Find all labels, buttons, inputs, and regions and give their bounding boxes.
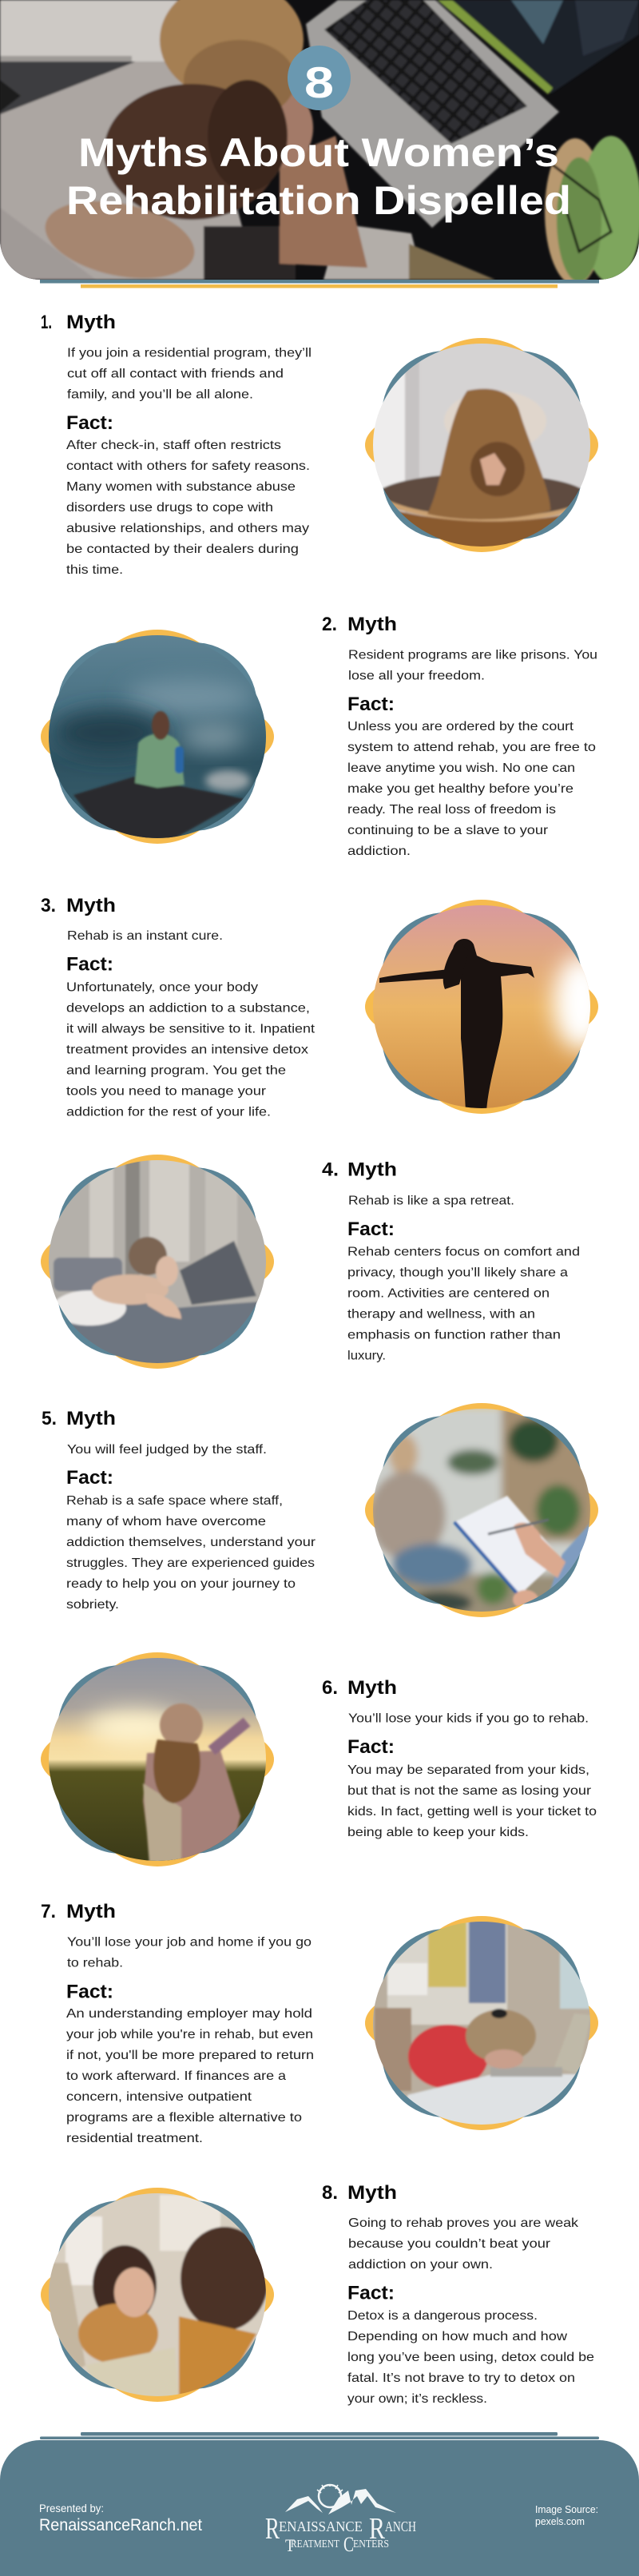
logo: Renaissance Ranch Treatment Centers: C bbox=[343, 2533, 354, 2556]
title: Rehabilitation Dispelled bbox=[66, 178, 571, 223]
footer divider bars bbox=[40, 2432, 599, 2439]
header photo banner bbox=[0, 0, 639, 291]
myth 3 heading bbox=[41, 895, 116, 916]
myth 8 heading: 8. bbox=[322, 2182, 338, 2204]
number badge bbox=[288, 46, 351, 110]
fact 6 text: You may be separated from your kids, bbox=[347, 1763, 589, 1777]
fact 3 text: it will always be sensitive to it. Inpatient bbox=[66, 1023, 316, 1036]
fact 1 text: this time. bbox=[66, 563, 123, 577]
fact 7 text: An understanding employer may hold bbox=[66, 2007, 312, 2021]
image source: Image Source: bbox=[535, 2503, 598, 2515]
myth 3 heading: Myth bbox=[66, 895, 116, 916]
myth 7 heading: Myth bbox=[66, 1901, 116, 1922]
presented by: RenaissanceRanch.net bbox=[39, 2516, 202, 2534]
myth 6 statement: You’ll lose your kids if you go to rehab. bbox=[348, 1711, 589, 1726]
fact 8 text: fatal. It’s not brave to try to detox on bbox=[347, 2371, 575, 2385]
fact 7 heading: Fact: bbox=[66, 1982, 113, 2002]
image source: pexels.com bbox=[535, 2515, 585, 2527]
photo: mother and child in field at sunset bbox=[41, 1652, 274, 1866]
myth 2 heading bbox=[322, 614, 397, 635]
fact 4 text bbox=[347, 1245, 580, 1363]
fact 8 text: your own; it’s reckless. bbox=[347, 2392, 487, 2406]
fact 2 text bbox=[347, 720, 596, 858]
fact 4 text: Rehab centers focus on comfort and bbox=[347, 1245, 580, 1259]
fact 7 text: if not, you'll be more prepared to return bbox=[66, 2049, 314, 2062]
myth 7 statement: You’ll lose your job and home if you go bbox=[67, 1935, 312, 1950]
logo: Renaissance Ranch Treatment Centers: ANCH bbox=[385, 2518, 416, 2534]
fact 1 text: disorders use drugs to cope with bbox=[66, 501, 273, 515]
fact 4 text: emphasis on function rather than bbox=[347, 1328, 561, 1342]
myth 4 heading bbox=[322, 1159, 397, 1181]
fact 2 text: system to attend rehab, you are free to bbox=[347, 741, 596, 754]
photo: woman with head on table bbox=[365, 338, 598, 552]
logo: Renaissance Ranch Treatment Centers: R bbox=[265, 2512, 280, 2546]
fact 4 text: privacy, though you’ll likely share a bbox=[347, 1266, 568, 1280]
fact 2 text: ready. The real loss of freedom is bbox=[347, 803, 556, 817]
fact 6 text: but that is not the same as losing your bbox=[347, 1784, 592, 1798]
fact 7 text bbox=[66, 2007, 314, 2145]
fact 5 text: Rehab is a safe space where staff, bbox=[66, 1494, 283, 1508]
title bbox=[66, 130, 571, 223]
myth 7 heading bbox=[41, 1901, 116, 1922]
panel: myth 5 bbox=[42, 1403, 598, 1622]
fact 3 text: develops an addiction to a substance, bbox=[66, 1002, 310, 1015]
fact 1 text: be contacted by their dealers during bbox=[66, 543, 299, 556]
fact 8 text: long you’ve been using, detox could be bbox=[347, 2351, 594, 2364]
myth 4 heading: 4. bbox=[322, 1159, 339, 1181]
fact 5 text bbox=[66, 1494, 316, 1612]
fact 1 text bbox=[66, 439, 310, 577]
myth 5 heading: 5. bbox=[42, 1408, 57, 1429]
fact 7 text: programs are a flexible alternative to bbox=[66, 2111, 302, 2125]
icon: sun and mountains bbox=[285, 2484, 396, 2514]
fact 2 text: continuing to be a slave to your bbox=[347, 824, 549, 837]
panel: myth 3 bbox=[41, 895, 609, 1119]
panel: myth 7 bbox=[41, 1901, 598, 2145]
fact 1 text: Many women with substance abuse bbox=[66, 480, 296, 494]
myth 8 heading: Myth bbox=[347, 2182, 397, 2204]
fact 4 text: therapy and wellness, with an bbox=[347, 1307, 535, 1322]
myth 4 statement: Rehab is like a spa retreat. bbox=[348, 1194, 514, 1208]
myth 2 statement bbox=[348, 649, 597, 682]
myth 1 heading: Myth bbox=[66, 312, 116, 333]
fact 8 heading: Fact: bbox=[347, 2282, 395, 2304]
logo: Renaissance Ranch Treatment Centers: R bbox=[369, 2512, 386, 2546]
myth 6 heading: Myth bbox=[347, 1677, 397, 1699]
myth 2 statement: lose all your freedom. bbox=[348, 670, 485, 682]
myth 2 heading: 2. bbox=[322, 614, 337, 635]
panel: myth 6 bbox=[41, 1652, 597, 1866]
myth 8 heading bbox=[322, 2182, 397, 2204]
fact 5 text: struggles. They are experienced guides bbox=[66, 1556, 315, 1570]
myth 7 statement bbox=[67, 1935, 312, 1970]
footer panel bbox=[0, 2440, 639, 2576]
logo: Renaissance Ranch Treatment Centers: REATMENT bbox=[291, 2538, 339, 2550]
fact 5 text: sobriety. bbox=[66, 1598, 119, 1612]
presented by: Presented by: bbox=[39, 2502, 104, 2514]
photo: woman on dock bbox=[41, 630, 274, 844]
myth 5 heading bbox=[42, 1408, 116, 1429]
presented by bbox=[39, 2502, 202, 2534]
fact 3 heading: Fact: bbox=[66, 954, 113, 975]
myth 1 statement bbox=[67, 347, 312, 401]
fact 2 heading: Fact: bbox=[347, 694, 395, 715]
fact 3 text: treatment provides an intensive detox bbox=[66, 1044, 308, 1056]
fact 6 text: kids. In fact, getting well is your ticket to bbox=[347, 1805, 597, 1819]
photo: tired woman at desk bbox=[365, 1916, 598, 2130]
myth 6 heading bbox=[322, 1677, 397, 1699]
panel: myth 8 bbox=[41, 2182, 594, 2406]
fact 6 heading: Fact: bbox=[347, 1736, 395, 1758]
myth 8 statement bbox=[348, 2216, 579, 2272]
myth 3 heading: 3. bbox=[41, 895, 56, 916]
fact 8 text bbox=[347, 2309, 594, 2406]
myth 7 heading: 7. bbox=[41, 1901, 56, 1922]
fact 1 text: abusive relationships, and others may bbox=[66, 522, 309, 535]
myth 1 heading: 1. bbox=[41, 312, 52, 333]
logo: Renaissance Ranch Treatment Centers: ENTERS bbox=[353, 2538, 389, 2550]
myth 1 statement: family, and you’ll be all alone. bbox=[67, 388, 253, 401]
fact 8 text: Depending on how much and how bbox=[347, 2330, 567, 2343]
fact 7 text: to work afterward. If finances are a bbox=[66, 2069, 286, 2083]
fact 7 text: concern, intensive outpatient bbox=[66, 2090, 252, 2104]
fact 3 text: and learning program. You get the bbox=[66, 1064, 286, 1077]
panel: myth 4 bbox=[41, 1155, 580, 1369]
myth 1 heading bbox=[41, 312, 116, 333]
fact 2 text: Unless you are ordered by the court bbox=[347, 720, 574, 733]
fact 5 text: ready to help you on your journey to bbox=[66, 1577, 296, 1591]
panel: myth 1 bbox=[41, 312, 598, 577]
fact 1 text: After check-in, staff often restricts bbox=[66, 439, 281, 452]
myth 8 statement: because you couldn’t beat your bbox=[348, 2237, 551, 2251]
myth 7 statement: to rehab. bbox=[67, 1956, 123, 1970]
fact 1 heading: Fact: bbox=[66, 412, 113, 434]
fact 6 text: being able to keep your kids. bbox=[347, 1826, 529, 1839]
fact 2 text: addiction. bbox=[347, 845, 411, 858]
fact 4 text: luxury. bbox=[347, 1349, 386, 1363]
fact 3 text bbox=[66, 981, 316, 1119]
myth 8 statement: Going to rehab proves you are weak bbox=[348, 2216, 579, 2230]
fact 5 text: addiction themselves, understand your bbox=[66, 1536, 316, 1549]
fact 3 text: addiction for the rest of your life. bbox=[66, 1106, 271, 1119]
myth 6 heading: 6. bbox=[322, 1677, 338, 1699]
title: Myths About Women’s bbox=[78, 130, 559, 175]
myth 5 statement: You will feel judged by the staff. bbox=[67, 1443, 267, 1457]
myth 1 statement: If you join a residential program, they’ll bbox=[67, 347, 312, 360]
image source bbox=[535, 2503, 598, 2527]
logo: Renaissance Ranch Treatment Centers: ENAISSANCE bbox=[279, 2518, 363, 2534]
fact 6 text bbox=[347, 1763, 597, 1839]
header divider bars bbox=[40, 280, 599, 288]
fact 1 text: contact with others for safety reasons. bbox=[66, 459, 310, 473]
fact 3 text: Unfortunately, once your body bbox=[66, 981, 258, 994]
number badge: 8 bbox=[304, 58, 334, 107]
photo: woman relaxing on bed bbox=[41, 1155, 274, 1369]
fact 5 heading: Fact: bbox=[66, 1467, 113, 1489]
fact 3 text: tools you need to manage your bbox=[66, 1085, 267, 1098]
photo: silhouette with open arms at sunset bbox=[365, 900, 609, 1114]
fact 4 text: room. Activities are centered on bbox=[347, 1286, 550, 1301]
photo: counselor taking notes bbox=[365, 1403, 598, 1622]
fact 8 text: Detox is a dangerous process. bbox=[347, 2309, 538, 2323]
myth 1 statement: cut off all contact with friends and bbox=[67, 368, 284, 380]
myth 2 heading: Myth bbox=[347, 614, 397, 635]
myth 2 statement: Resident programs are like prisons. You bbox=[348, 649, 597, 662]
myth 5 heading: Myth bbox=[66, 1408, 116, 1429]
myth 4 heading: Myth bbox=[347, 1159, 397, 1181]
fact 7 text: your job while you're in rehab, but even bbox=[66, 2028, 313, 2041]
myth 8 statement: addiction on your own. bbox=[348, 2258, 493, 2272]
fact 5 text: many of whom have overcome bbox=[66, 1515, 266, 1529]
fact 2 text: make you get healthy before you’re bbox=[347, 782, 574, 796]
myth 3 statement: Rehab is an instant cure. bbox=[67, 929, 223, 943]
panel: myth 2 bbox=[41, 614, 597, 858]
logo: Renaissance Ranch Treatment Centers bbox=[265, 2484, 416, 2556]
logo: Renaissance Ranch Treatment Centers: T bbox=[285, 2535, 295, 2555]
fact 2 text: leave anytime you wish. No one can bbox=[347, 761, 575, 775]
fact 7 text: residential treatment. bbox=[66, 2132, 203, 2145]
photo: woman smiling in mirror bbox=[41, 2188, 274, 2402]
fact 4 heading: Fact: bbox=[347, 1218, 395, 1240]
